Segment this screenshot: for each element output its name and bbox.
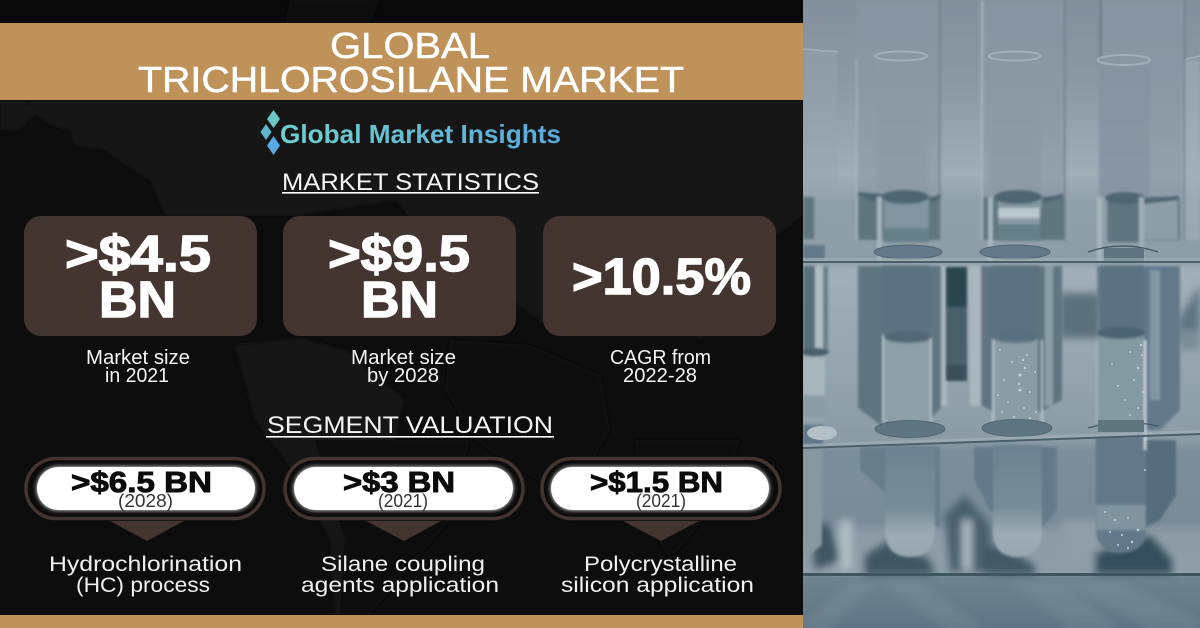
stat captions: by 2028 bbox=[367, 365, 439, 387]
segment captions: Hydrochlorination bbox=[49, 552, 242, 576]
stat captions bbox=[86, 347, 711, 387]
glass highlights bbox=[877, 197, 882, 262]
pill: polycrystalline: (2021) bbox=[636, 490, 686, 511]
rack shelf holes bbox=[807, 245, 1158, 440]
front row test tubes with liquid bbox=[856, 126, 1179, 558]
title bbox=[138, 32, 684, 92]
stat card: market size 2028: >$9.5 bbox=[328, 225, 470, 282]
bubbles in the liquid bbox=[997, 344, 1146, 549]
stat captions: in 2021 bbox=[105, 365, 169, 387]
far left and far right tubes bbox=[801, 50, 1200, 560]
stat captions: Market size bbox=[351, 347, 456, 369]
bottom banner bbox=[0, 615, 803, 628]
segment captions: Silane coupling bbox=[321, 552, 485, 576]
logo diamonds bbox=[260, 110, 280, 155]
floor reflections bbox=[810, 602, 1192, 624]
stat captions: CAGR from bbox=[610, 347, 711, 369]
pill: silane coupling: >$3 BN bbox=[343, 467, 455, 499]
dark block behind the rack bbox=[946, 267, 967, 381]
stat card: CAGR: >10.5% bbox=[572, 248, 751, 305]
stat card: market size 2021: BN bbox=[99, 271, 176, 328]
stat card: market size 2021: >$4.5 bbox=[65, 225, 211, 282]
left dark panel with world map bbox=[0, 0, 803, 628]
title: GLOBAL bbox=[330, 25, 490, 66]
top banner bbox=[0, 23, 803, 100]
stat card: market size 2028 bbox=[283, 216, 516, 336]
stat captions: 2022-28 bbox=[623, 365, 697, 387]
heading: market statistics: MARKET STATISTICS bbox=[282, 169, 539, 196]
segment captions bbox=[49, 552, 754, 597]
stat card: market size 2028: BN bbox=[361, 271, 438, 328]
logo wordmark: Global Market Insights bbox=[280, 119, 561, 149]
title: TRICHLOROSILANE MARKET bbox=[138, 59, 684, 100]
logo: Global Market Insights bbox=[260, 110, 561, 155]
stat card: market size 2021 bbox=[24, 216, 257, 336]
back row test tubes bbox=[856, 0, 1186, 530]
pill: hydrochlorination: (2028) bbox=[118, 490, 173, 511]
pill: hydrochlorination: >$6.5 BN bbox=[71, 467, 212, 499]
stat card: CAGR bbox=[543, 216, 776, 336]
blurred background tones bbox=[810, 285, 1200, 575]
photo: test tubes in a rack bbox=[801, 0, 1200, 628]
glass rack shelves bbox=[803, 258, 1200, 576]
pill: polycrystalline bbox=[542, 458, 780, 541]
pill: hydrochlorination bbox=[26, 458, 264, 541]
stat captions: Market size bbox=[86, 347, 190, 369]
segment captions: agents application bbox=[301, 573, 499, 597]
test tube rims bbox=[803, 49, 1200, 65]
segment captions: Polycrystalline bbox=[584, 552, 737, 576]
segment captions: (HC) process bbox=[76, 573, 210, 597]
faint world map bbox=[1, 101, 802, 614]
pill: silane coupling bbox=[285, 458, 523, 541]
heading: segment valuation: SEGMENT VALUATION bbox=[267, 412, 553, 439]
segment captions: silicon application bbox=[561, 573, 754, 597]
pill: polycrystalline: >$1.5 BN bbox=[590, 467, 723, 499]
pill: silane coupling: (2021) bbox=[378, 490, 428, 511]
